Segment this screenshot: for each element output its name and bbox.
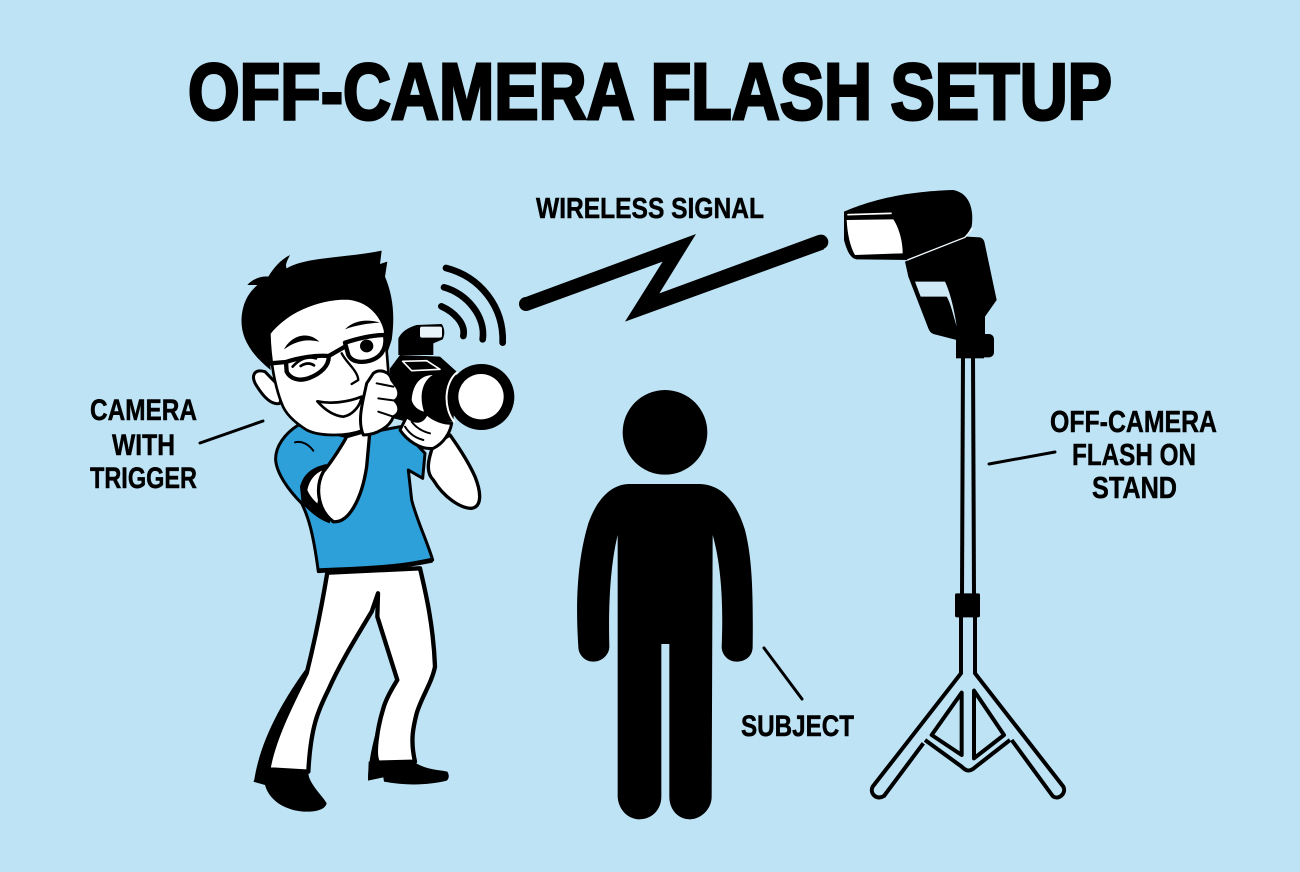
arrow: wireless lightning bolt xyxy=(519,234,828,322)
label: off-camera flash on stand xyxy=(1050,404,1217,505)
left arm xyxy=(319,430,370,522)
camera xyxy=(387,324,514,430)
ear xyxy=(254,371,283,404)
off-camera flash xyxy=(844,190,997,358)
light stand xyxy=(872,355,1064,797)
leader line: subject xyxy=(764,648,802,699)
shirt xyxy=(276,425,433,572)
label: off-camera flash on stand: FLASH ON xyxy=(1072,437,1196,472)
label: camera with trigger xyxy=(90,394,197,495)
sleeve cuff xyxy=(300,464,330,523)
stand clamp and tripod xyxy=(872,593,1064,797)
label: off-camera flash on stand: STAND xyxy=(1092,470,1177,505)
label: camera with trigger: WITH xyxy=(112,429,175,462)
lower hand xyxy=(400,413,452,449)
hair xyxy=(241,251,393,370)
leader line: camera xyxy=(200,421,263,443)
subject silhouette xyxy=(577,390,753,819)
right shoe xyxy=(368,762,449,784)
flash knob and mount xyxy=(956,335,984,358)
photographer xyxy=(241,251,514,812)
label: camera with trigger: CAMERA xyxy=(90,394,197,427)
icon: signal waves xyxy=(441,268,503,343)
camera body xyxy=(387,355,457,422)
label: wireless signal: WIRELESS SIGNAL xyxy=(536,193,764,225)
hot-shoe trigger xyxy=(398,324,444,355)
upper hand xyxy=(360,371,399,435)
right arm xyxy=(428,435,480,508)
legs and trousers xyxy=(253,568,449,812)
leader line: flash xyxy=(989,452,1055,464)
glasses xyxy=(271,335,385,380)
label: camera with trigger: TRIGGER xyxy=(90,462,197,495)
eyebrows and eyes xyxy=(284,335,319,349)
stand poles xyxy=(962,355,974,595)
face xyxy=(269,298,388,435)
flash window xyxy=(847,219,903,255)
title: OFF-CAMERA FLASH SETUP xyxy=(188,47,1112,136)
flash head xyxy=(844,190,972,260)
smile xyxy=(317,397,362,417)
flash display xyxy=(915,282,957,327)
left shoe xyxy=(253,769,327,812)
flash body xyxy=(905,237,997,340)
label: off-camera flash on stand: OFF-CAMERA xyxy=(1050,404,1217,439)
label: subject: SUBJECT xyxy=(741,710,854,743)
lens xyxy=(448,364,514,430)
